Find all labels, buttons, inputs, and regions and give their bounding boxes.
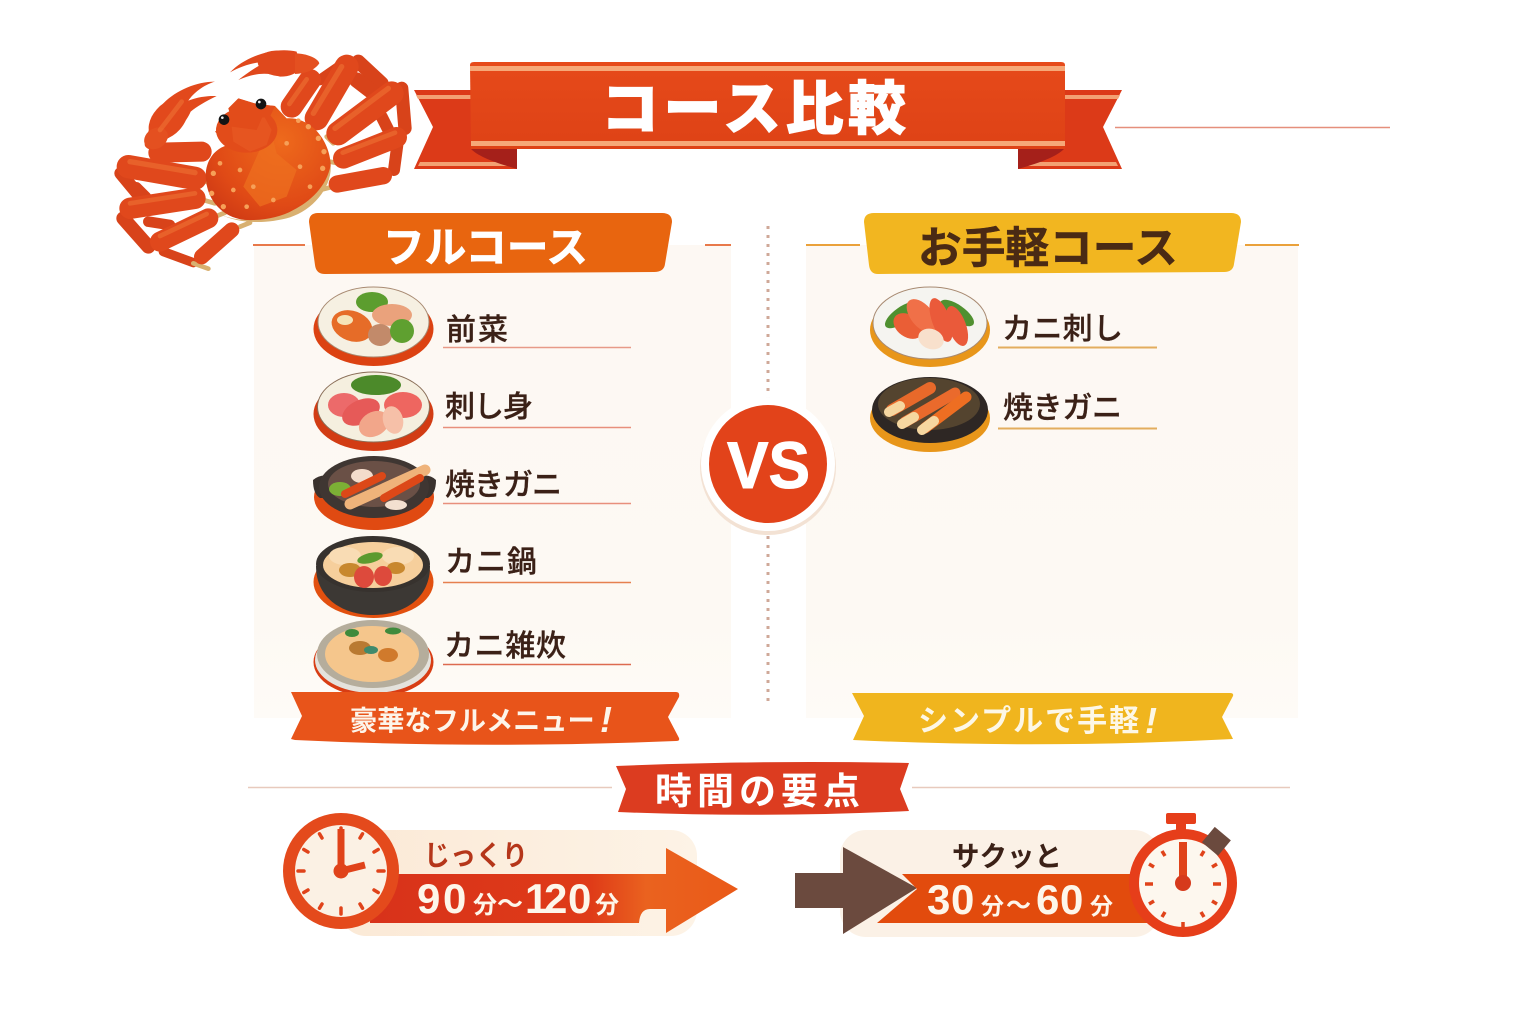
divider: dotted line bbox=[766, 226, 770, 702]
dish: crab porridge bbox=[314, 620, 434, 697]
panel: light course background bbox=[806, 245, 1299, 718]
label: crab hot pot: カニ鍋 bbox=[445, 546, 537, 579]
stopwatch icon bbox=[1129, 813, 1237, 937]
orange band bbox=[877, 874, 1150, 923]
ribbon left tail bbox=[414, 90, 517, 169]
banner: full menu: 豪華なフルメニュー bbox=[350, 705, 595, 736]
crab rear leg segments bbox=[121, 62, 405, 263]
crab shell bbox=[206, 98, 331, 221]
duration: 90 to 120 minutes: 120 bbox=[525, 875, 591, 922]
time: light course bbox=[795, 813, 1237, 937]
VS badge bbox=[700, 397, 836, 535]
banner: full menu: ! bbox=[600, 699, 612, 740]
title ribbon bbox=[414, 62, 1122, 169]
header: light course bbox=[864, 213, 1241, 274]
duration: 90 to 120 minutes: 分 bbox=[473, 892, 497, 919]
banner: full menu bbox=[291, 692, 679, 745]
duration: 30 to 60 minutes: ～ bbox=[1006, 892, 1031, 920]
crab front leg segments bbox=[128, 67, 397, 257]
illustration: crab bbox=[121, 49, 405, 269]
cream backing bbox=[840, 830, 1160, 937]
label: light course grilled crab: 焼きガニ bbox=[1003, 392, 1122, 425]
dish: crab sashimi bbox=[870, 287, 990, 367]
arrow bbox=[370, 848, 738, 933]
duration: 30 to 60 minutes: 分 bbox=[1090, 893, 1113, 919]
cream backing bbox=[340, 830, 697, 936]
duration: 90 to 120 minutes: 90 bbox=[417, 875, 466, 922]
dish: sashimi bbox=[314, 372, 434, 451]
banner: simple bbox=[852, 693, 1233, 744]
ribbon right tail bbox=[1018, 90, 1122, 169]
duration: 30 to 60 minutes: 30 bbox=[927, 876, 974, 923]
heading: time points bbox=[616, 762, 909, 815]
duration: 90 to 120 minutes: 分 bbox=[595, 892, 619, 919]
dish: grilled crab bbox=[313, 456, 436, 530]
header: light course: お手軽コース bbox=[918, 225, 1178, 273]
dish: crab hot pot bbox=[314, 536, 434, 618]
ribbon body bbox=[470, 62, 1065, 149]
title text: コース比較 bbox=[601, 77, 906, 142]
brown arrow bbox=[795, 847, 917, 934]
duration: 30 to 60 minutes: 60 bbox=[1036, 876, 1083, 923]
dividers beside time heading bbox=[248, 786, 1290, 788]
label: quick: サクッと bbox=[952, 841, 1062, 872]
header: full course: フルコース bbox=[383, 224, 588, 271]
panel: full course background bbox=[253, 245, 731, 718]
time: full course bbox=[283, 813, 738, 936]
duration: 30 to 60 minutes: 分 bbox=[981, 893, 1004, 919]
heading: time points: 時間の要点 bbox=[655, 771, 860, 812]
label: sashimi: 刺し身 bbox=[445, 391, 533, 424]
header: full course bbox=[309, 213, 672, 274]
VS badge: VS bbox=[727, 428, 810, 502]
banner: simple: シンプルで手軽 bbox=[918, 705, 1141, 738]
dish: appetizer bbox=[314, 287, 434, 366]
duration: 90 to 120 minutes: ～ bbox=[497, 889, 523, 919]
dish: light course grilled crab bbox=[870, 377, 990, 452]
label: grilled crab: 焼きガニ bbox=[445, 469, 562, 502]
decorative line right of title bbox=[1115, 126, 1390, 128]
label: crab porridge: カニ雑炊 bbox=[444, 630, 566, 663]
crab eyes bbox=[219, 99, 266, 125]
label: crab sashimi: カニ刺し bbox=[1002, 313, 1123, 346]
clock icon bbox=[283, 813, 399, 929]
crab claws bbox=[140, 49, 319, 154]
label: appetizer: 前菜 bbox=[446, 314, 508, 347]
banner: simple: ! bbox=[1145, 700, 1159, 741]
crab leg tips and joints bbox=[193, 123, 338, 269]
label: slowly: じっくり bbox=[424, 840, 528, 871]
